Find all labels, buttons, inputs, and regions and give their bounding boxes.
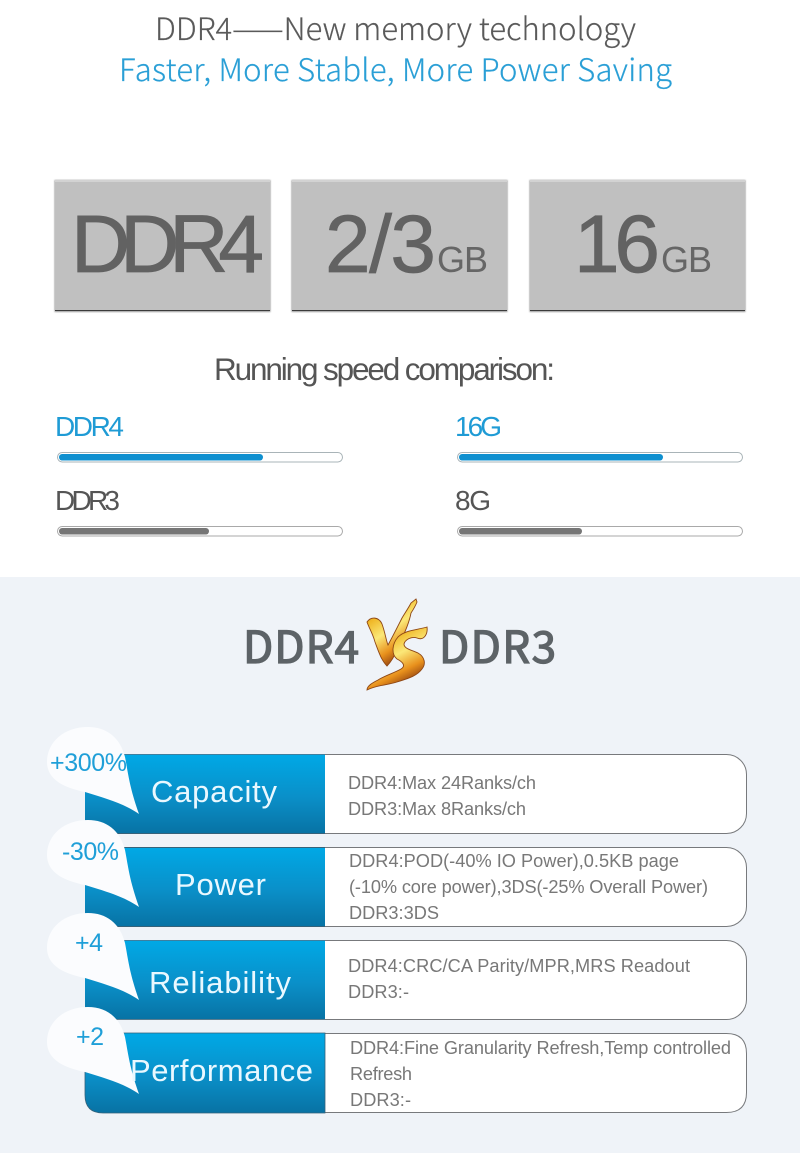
panel: power row: DDR3:3DS (349, 903, 439, 923)
panel: 2/3GB: GB (437, 239, 488, 280)
heading: running speed comparison: Running speed comparison: (214, 351, 555, 387)
heading: DDR4 vs DDR3: DDR3 (439, 612, 556, 676)
panel: power row: (-10% core power),3DS(-25% Overall Power) (349, 877, 708, 897)
heading: DDR4 vs DDR3 (243, 612, 556, 676)
bar chart: DDR3: DDR3 (55, 485, 120, 516)
panel: reliability row: Reliability (149, 965, 292, 1000)
panel: reliability row: DDR4:CRC/CA Parity/MPR,MRS Readout (348, 956, 690, 976)
panel: 2/3GB: 2/3 (325, 199, 436, 290)
panel: comparison background (0, 577, 800, 1153)
panel: power row (85, 847, 746, 927)
panel: 16GB: 16 (574, 199, 660, 290)
panel: DDR4: DDR4 (71, 199, 264, 290)
panel: reliability row: DDR3:- (348, 982, 409, 1002)
label: performance: Performance (130, 1053, 313, 1088)
panel: power row: Power (175, 867, 266, 902)
callout: -30%: -30% (62, 838, 119, 866)
callout: +2: +2 (76, 1023, 104, 1051)
bar chart: 16G (455, 411, 742, 462)
title: Faster, More Stable, More Power Saving (119, 45, 672, 90)
bar chart: 16G: 16G (455, 411, 502, 442)
panel: capacity row (85, 754, 746, 834)
icon: VS emblem (367, 599, 427, 690)
bar chart: DDR3 (55, 485, 342, 536)
callout: +300% (47, 727, 139, 814)
title (119, 4, 672, 90)
panel: performance row: DDR4:Fine Granularity Refresh,Temp controlled (350, 1038, 731, 1058)
panel: performance row (85, 1033, 746, 1113)
callout: +300%: +300% (50, 749, 127, 777)
panel: capacity row: Capacity (151, 774, 278, 809)
bar chart: DDR4 (55, 411, 342, 462)
heading: DDR4 vs DDR3: DDR4 (243, 612, 359, 676)
bar chart: DDR4: DDR4 (55, 411, 124, 442)
callout: +2 (47, 1007, 139, 1094)
panel: 2/3GB (292, 180, 508, 312)
panel: DDR4 (54, 180, 270, 312)
panel: capacity row: DDR3:Max 8Ranks/ch (348, 799, 526, 819)
panel: 16GB (530, 180, 746, 312)
panel: performance row: DDR3:- (350, 1090, 411, 1110)
callout: +4: +4 (75, 929, 103, 957)
panel: capacity row: DDR4:Max 24Ranks/ch (348, 773, 536, 793)
panel: 16GB: GB (661, 239, 712, 280)
bar chart: 8G: 8G (455, 485, 491, 516)
title: DDR4——New memory technology (155, 4, 636, 49)
bar chart: 8G (455, 485, 742, 536)
panel: performance row: Refresh (350, 1064, 412, 1084)
panel: reliability row (85, 940, 746, 1020)
panel: power row: DDR4:POD(-40% IO Power),0.5KB page (349, 851, 679, 871)
callout: -30% (47, 820, 139, 907)
callout: +4 (47, 913, 139, 1000)
